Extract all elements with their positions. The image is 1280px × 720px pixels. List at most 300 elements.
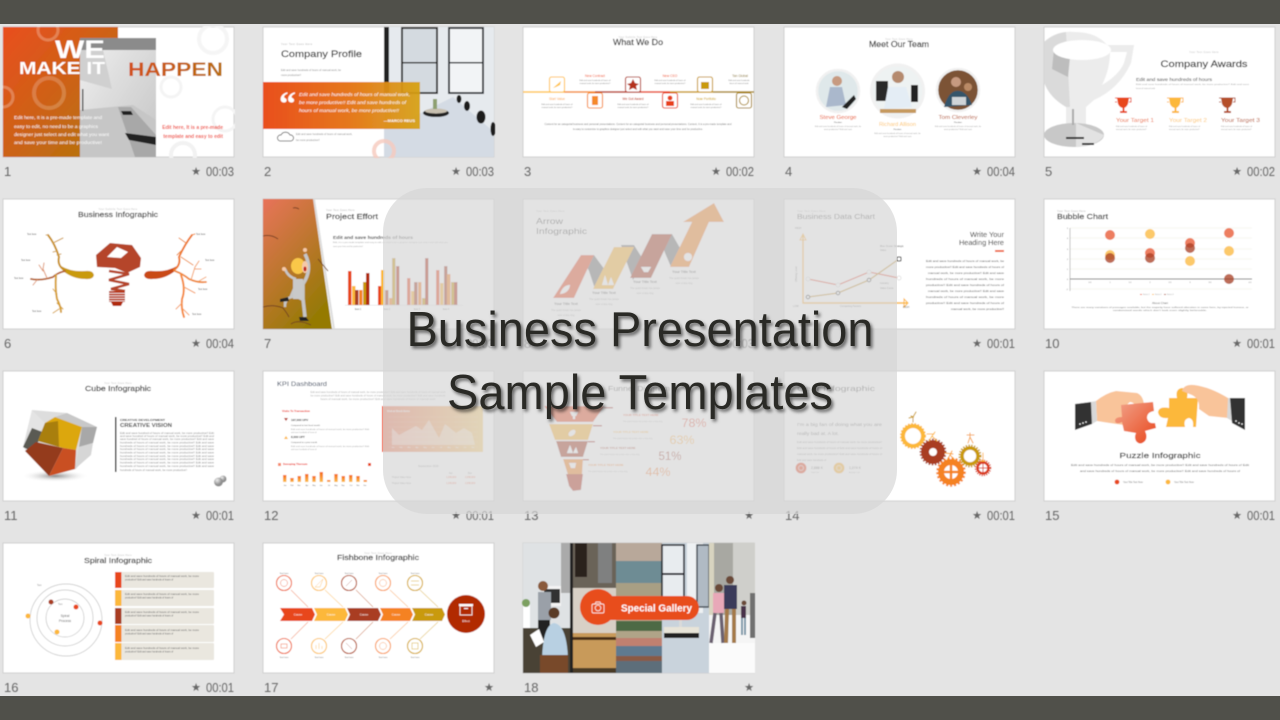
percentages — [646, 418, 706, 479]
area chart panel: Sep — [456, 447, 459, 449]
table: September 2020 — [418, 464, 439, 468]
title: What We Do — [613, 37, 663, 47]
area chart panel: May — [423, 447, 427, 449]
slide 3: what we do — [523, 27, 754, 157]
monthly bar chart: Jun — [320, 485, 322, 487]
caption 10: ★ — [1232, 338, 1242, 350]
left hand — [1075, 391, 1144, 430]
caption 10: 10 — [1045, 336, 1059, 351]
slide 8: arrow infographic: The quick brown fox jumps — [669, 277, 700, 280]
slide 7: project effort: save your time and be productive! — [333, 245, 363, 248]
slide 3: what we do: hours of manual work — [729, 83, 749, 85]
caption 3 — [524, 164, 754, 179]
slide 12: KPI dashboard: hours of manual work, be more productive!! Edit and save hundreds of hours of manual work — [320, 398, 437, 401]
slide 4: meet our team: more productive!! Edit and save — [944, 128, 973, 131]
table: 1,209,000 — [446, 483, 457, 485]
slide 3: what we do: manual work, be more productive!! — [691, 106, 722, 109]
caption 4: 00:04 — [987, 165, 1015, 179]
caption 16: 16 — [4, 680, 18, 695]
cause labels — [280, 572, 420, 659]
bubble chart: 3.5 — [1209, 282, 1212, 284]
cause circles — [276, 576, 422, 654]
timeline labels: New Contract — [585, 74, 605, 78]
caption 2: 00:03 — [466, 165, 494, 179]
bubble chart: 4 — [1067, 238, 1069, 240]
slide 2: company profile: be more productive!! — [296, 138, 320, 142]
caption 8 — [524, 336, 754, 351]
slide 4: meet our team: Edit and save hundreds of hours of manual work, be — [874, 132, 922, 135]
slide 7: project effort — [263, 199, 494, 329]
caption 1: 00:03 — [206, 165, 234, 179]
process rows: productive!! Edit and save hundreds of hours of — [125, 650, 173, 654]
caption 15 — [1045, 508, 1275, 523]
process rows: Edit and save hundreds of hours of manual work, be more — [125, 629, 200, 632]
caption 2: 2 — [264, 164, 271, 179]
lead text — [797, 422, 882, 437]
headline: MAKE IT — [19, 58, 105, 78]
branch labels: Text here — [32, 310, 42, 313]
line chart: HIGH — [795, 227, 801, 230]
slide 10: bubble chart — [1044, 199, 1275, 329]
red note — [162, 125, 223, 140]
slide 3: what we do: Edit and save hundreds of hours of — [690, 103, 722, 106]
slide 18: special gallery — [522, 543, 755, 673]
percentages: 51% — [658, 451, 682, 463]
paragraph — [926, 259, 1004, 311]
cause labels: Text here — [410, 656, 420, 659]
caption 4 — [785, 164, 1015, 179]
slide 4: meet our team: Your Text Goes Here — [885, 38, 913, 41]
title: Bubble Chart — [1057, 212, 1109, 221]
slide 5: company awards — [1044, 27, 1275, 157]
timeline icons — [550, 77, 752, 108]
trophy icons — [1115, 98, 1235, 113]
slide 8: arrow infographic: The quick brown fox jumps — [630, 287, 661, 290]
table: 2,058,000 — [465, 477, 476, 479]
timeline labels — [549, 74, 748, 101]
process rows: Edit and save hundreds of hours of manual work, be more — [125, 647, 200, 650]
line chart: Competing Factors — [840, 305, 862, 308]
slide 17: fishbone infographic — [263, 543, 494, 673]
caption 1: 1 — [4, 164, 11, 179]
line chart: Blue Ocean Strategic — [880, 245, 904, 248]
puzzle piece: red — [1115, 402, 1156, 444]
effect circle: Effect — [462, 619, 470, 623]
slide 10: bubble chart: Your Text Goes Here — [1057, 210, 1086, 213]
quote band: be more productive!! Edit and save hundreds of — [299, 100, 407, 105]
slide 5: company awards: manual work, be more productive!! — [1116, 128, 1147, 131]
photo strip 1 — [522, 543, 570, 673]
bubble chart: 5 — [1067, 228, 1069, 230]
bubble chart: 2 — [1067, 259, 1069, 261]
caption 9: 00:01 — [987, 337, 1015, 351]
monthly bar chart: May — [312, 485, 316, 487]
paragraph: hundreds of hours of manual work, be more productive!! Edit and save — [120, 447, 215, 451]
body text: designer just select and edit what you want — [14, 132, 110, 137]
slide 6: business infographic — [3, 199, 234, 329]
table — [392, 464, 476, 485]
area chart panel: Jan — [392, 447, 394, 449]
paragraph: hundreds of hours of manual work, be more productive!! Edit and save — [120, 444, 215, 448]
title: Sample Templates — [447, 366, 833, 420]
paragraph — [120, 431, 215, 472]
caption 8: 8 — [524, 336, 531, 351]
bubble chart: 1 — [1109, 282, 1111, 284]
slide 3: what we do: manual work, be more productive!! — [542, 106, 573, 109]
title — [406, 303, 874, 420]
caption 6: 00:04 — [206, 337, 234, 351]
title overlay panel — [383, 188, 897, 514]
caption 5 — [1045, 164, 1275, 179]
paragraph: hundreds of hours of manual work, be more productive!! Edit and save — [120, 464, 215, 468]
slide 4: meet our team: Position — [834, 121, 843, 124]
about chart — [1072, 301, 1249, 312]
area chart panel: Feb — [400, 447, 402, 449]
timeline labels: New CEO — [663, 74, 678, 78]
paragraph: hundreds of hours of manual work, be more — [926, 295, 1004, 299]
bubble chart: Series 1 — [1143, 294, 1150, 296]
top bar — [0, 0, 1280, 24]
caption 15: ★ — [1232, 510, 1242, 522]
slide 3: what we do: manual work, be more productive!! — [618, 106, 649, 109]
kpi block: Compared to a prior month — [291, 441, 318, 444]
caption 13: ★ — [744, 510, 754, 522]
paragraph: hundreds of hours of manual work, be more productive!! Edit and save — [120, 454, 215, 458]
paragraph: save hundred of hours of manual work, be more productive!! Edit and save — [120, 437, 215, 441]
bar chart: Item 2 — [384, 308, 391, 311]
slide 3: what we do: manual work, be more productive!! — [655, 82, 686, 85]
caption 2: ★ — [451, 166, 461, 178]
caption 2 — [264, 164, 494, 179]
quote band: —MARCO REUS — [384, 118, 415, 123]
photo strip 5 — [709, 543, 755, 673]
subtitle: Edit and save hundreds of hours — [333, 235, 414, 240]
caption 11: 00:01 — [206, 509, 234, 523]
table: 2,058,000 — [465, 483, 476, 485]
spheres — [214, 476, 226, 486]
funnel labels: YOUR TITLE TEXT HERE — [600, 446, 636, 450]
pill label — [580, 589, 699, 625]
line chart — [793, 227, 909, 309]
climber — [280, 248, 309, 321]
area chart panel — [382, 406, 483, 452]
timeline — [523, 91, 754, 93]
bubble chart: 0.5 — [1089, 282, 1092, 284]
heading: more productive!! — [281, 73, 301, 77]
targets: Your Target 1 — [1116, 118, 1154, 124]
paragraph: Edit and save hundred of hours of manual work, be more productive!! Edit — [120, 431, 214, 435]
arrow labels: Your Title Text — [672, 270, 697, 274]
funnel labels: YOUR TITLE TEXT HERE — [613, 430, 649, 434]
caption 7: 00:03 — [466, 337, 494, 351]
bubble chart: 4.5 — [1249, 282, 1252, 284]
funnel labels — [588, 413, 659, 467]
cause labels: Text here — [378, 656, 388, 659]
heading — [959, 232, 1005, 247]
spine chevrons — [280, 608, 445, 621]
caption 9: ★ — [972, 338, 982, 350]
photo strip 2 — [570, 543, 616, 673]
caption 16 — [4, 680, 234, 695]
slide 7: project effort: Your Text Goes Here — [326, 209, 355, 212]
names: Steve George — [820, 115, 856, 121]
caption 17: ★ — [484, 682, 494, 694]
spine chevrons: Cause — [360, 612, 369, 616]
heading: Your Text Goes Here — [281, 42, 313, 46]
heading: CREATIVE VISION — [120, 423, 172, 429]
cause labels: Text here — [410, 572, 420, 575]
monthly bar chart: Apr — [306, 484, 309, 487]
caption 14: 14 — [785, 508, 799, 523]
slide 2: company profile: Edit and save hundreds of hours of manual work, — [296, 132, 353, 136]
slide 8: arrow infographic: over a lazy dog — [637, 292, 654, 295]
caption 10: 00:01 — [1247, 337, 1275, 351]
slide 8: arrow infographic: over a lazy dog — [558, 314, 575, 317]
paragraph: Edit and save hundreds of — [797, 459, 826, 462]
right hand — [1182, 385, 1245, 430]
paragraph: hundreds of hours of manual work, be more productive!! Edit and save — [120, 460, 215, 464]
area chart panel: Nov — [472, 447, 475, 449]
quote band: “ — [279, 86, 296, 123]
slide 3: what we do: Your Subtitle Text Goes Here — [618, 36, 658, 39]
caption 5: 00:02 — [1247, 165, 1275, 179]
slide 11: cube infographic: Your Text Goes Here — [104, 382, 132, 385]
paragraph: more productive!! Edit and save hundreds of hours of — [926, 265, 1004, 269]
paragraph: productive!! Edit and save hundreds of hours of — [926, 283, 1004, 287]
slide 4: meet our team: Edit and save hundreds of hours of manual work, be — [815, 125, 862, 128]
portrait: Tom Cleverley — [937, 69, 979, 111]
slide 8: arrow infographic: The quick brown fox jumps — [589, 298, 620, 301]
caption 11 — [4, 508, 234, 523]
body text: Edit here, It is a pre-made template and — [14, 115, 102, 120]
about chart: randomised words which don't look even slightly believable. — [1113, 309, 1208, 312]
red note: template and easy to edit — [163, 134, 223, 140]
bar chart: Item 3 — [414, 308, 421, 311]
ribbon arrow — [553, 203, 724, 298]
caption 7 — [264, 336, 494, 351]
branch labels: Text here — [192, 313, 202, 316]
caption 17: 17 — [264, 680, 278, 695]
slide 4: meet our team: more productive!! Edit and save — [883, 135, 912, 138]
caption 12: 12 — [264, 508, 278, 523]
bubble chart: 3 — [1067, 249, 1069, 251]
monthly bar chart: Mar — [298, 484, 301, 487]
slide 12: KPI dashboard: Edit and save hundreds of hours of manual work, be more productive!! Edit and save hundreds of hours of manual work — [310, 391, 446, 394]
percentages: 44% — [646, 467, 670, 479]
caption 15: 15 — [1045, 508, 1059, 523]
bones — [291, 590, 438, 639]
bar chart: Item 4 — [443, 308, 450, 311]
photo strip 4 — [662, 543, 709, 673]
slide 3: what we do: Edit and save hundreds of hours of — [617, 103, 649, 106]
title: Gear Infographic — [797, 384, 875, 393]
slide 4: meet our team: Position — [954, 121, 963, 124]
heading: CREATIVE DEVELOPMENT — [120, 418, 165, 422]
title: KPI Dashboard — [277, 381, 328, 388]
bubble chart — [1066, 228, 1252, 296]
subtitle: Edit and save hundreds of hours — [1136, 77, 1213, 83]
area chart panel: Apr — [416, 446, 419, 449]
icon: cloud — [277, 132, 294, 141]
caption 13: 13 — [524, 508, 538, 523]
legend: Your Title Text Here — [1123, 481, 1144, 484]
divider — [115, 417, 116, 472]
paragraph — [544, 123, 732, 131]
title: Meet Our Team — [869, 40, 929, 49]
title: Arrow — [536, 216, 564, 226]
heading: Write Your — [970, 232, 1005, 239]
caption 15: 00:01 — [1247, 509, 1275, 523]
slide 14: gear infographic — [784, 371, 1015, 501]
bottom bar — [0, 696, 1280, 720]
stats: Total Cost — [811, 471, 819, 474]
timeline labels: Tan Global — [732, 74, 748, 78]
slide 4: meet our team: Edit and save hundreds of hours of manual work, be — [935, 125, 982, 128]
paragraph: and save hundreds of hours of manual work, be more productive!! Edit and save hundreds of hours of — [1080, 469, 1240, 473]
slide 6: business infographic: Your Subtitle Text Goes Here — [98, 208, 138, 211]
cause labels: Text here — [280, 572, 289, 575]
left tree — [31, 235, 94, 313]
headline: WE — [55, 36, 105, 64]
slide 8: arrow infographic: over a lazy dog — [676, 282, 693, 285]
red note: Edit here, It is a pre-made — [162, 125, 223, 131]
caption 3: 3 — [524, 164, 531, 179]
pill label: Special Gallery — [621, 604, 692, 614]
bubble chart: Series 2 — [1155, 294, 1162, 296]
line chart: LOW — [793, 305, 799, 308]
arrow labels: Your Title Text — [633, 280, 658, 284]
slide 16: spiral infographic — [3, 543, 234, 673]
area chart panel: Jul — [440, 447, 443, 449]
caption 3: 00:02 — [726, 165, 754, 179]
percentages: 78% — [682, 418, 706, 430]
caption 14: 00:01 — [987, 509, 1015, 523]
paragraph — [1071, 463, 1249, 473]
timeline labels: Now Portfolio — [696, 97, 716, 101]
bubble chart: 3 — [1189, 282, 1191, 284]
caption 7: ★ — [451, 338, 461, 350]
paragraph: is easy to customize to graphics designer just select and edit what you want and save your time and be productive. — [573, 128, 703, 131]
trophy silhouette — [1044, 32, 1134, 147]
about chart: About Chart — [1152, 301, 1168, 305]
line chart: HIGH — [903, 306, 909, 309]
branch labels: Text here — [198, 288, 208, 291]
caption 14: ★ — [972, 510, 982, 522]
area chart panel: Mar — [408, 447, 411, 449]
branch labels — [14, 233, 215, 316]
process rows: productive!! Edit and save hundreds of hours of — [125, 632, 173, 636]
title: Business Data Chart — [797, 212, 876, 221]
slide 4: meet our team — [784, 27, 1015, 157]
caption 16: 00:01 — [206, 681, 234, 695]
caption 16: ★ — [191, 682, 201, 694]
monthly bar chart: Feb — [291, 485, 294, 487]
slide 5: company awards: Your Text Goes Here — [1189, 50, 1219, 54]
slide 1: we make it happen — [2, 26, 235, 158]
slide 5: company awards: Edit and save hundreds of hours of manual work, be more productive!! Edit and save — [1136, 83, 1250, 86]
kpi block: Compared to last fiscal month — [291, 424, 321, 427]
monthly bar chart: Nov — [356, 485, 360, 487]
line chart: Value Curve — [880, 287, 894, 290]
monthly bar chart — [278, 462, 371, 487]
kpi block — [282, 409, 370, 451]
slide 13: funnel diagram: The quick brown fox jumps over a lazy dog — [588, 470, 628, 473]
caption 1 — [4, 164, 234, 179]
funnel labels: YOUR TITLE TEXT HERE — [588, 463, 624, 467]
line chart: Offering Level — [795, 266, 798, 282]
kpi block: Edit and save hundreds of hours of manual work, be more productive!! Edit — [291, 445, 370, 448]
process rows: productive!! Edit and save hundreds of hours of — [125, 614, 173, 618]
slide 5: company awards: Edit and save hundreds of hours of — [1221, 125, 1252, 128]
names: Richard Allison — [879, 122, 916, 128]
paragraph: hundreds of hours of manual work, be more productive!! — [120, 468, 187, 472]
caption 8: 00:03 — [726, 337, 754, 351]
monthly bar chart: Aug — [334, 484, 338, 487]
branch labels: Text here — [27, 233, 37, 236]
slide 13: funnel diagram: The quick brown fox jumps over a lazy dog — [613, 437, 653, 440]
slide 3: what we do: Edit and save hundreds of hours of — [579, 79, 611, 82]
percentages: 63% — [670, 435, 694, 447]
heading — [120, 418, 172, 429]
line chart: Industry — [880, 282, 890, 285]
branch labels: Text here — [21, 259, 31, 262]
slide 9: business data chart — [784, 199, 1015, 329]
area chart panel: Visit at Stock Items — [387, 410, 410, 413]
slide 8: arrow infographic: over a lazy dog — [596, 303, 613, 306]
title: Funnel Diagram — [608, 384, 670, 393]
bubble chart: 4 — [1229, 282, 1231, 284]
caption 6 — [4, 336, 234, 351]
spine chevrons: Cause — [392, 612, 401, 616]
title — [536, 216, 587, 236]
monthly bar chart: Jan — [284, 485, 286, 487]
cause labels: Text here — [314, 572, 324, 575]
process rows: Edit and save hundreds of hours of manual work, be more — [125, 611, 200, 614]
slide 13: funnel diagram: The quick brown fox jumps over a lazy dog — [623, 420, 663, 423]
arrow labels — [554, 270, 697, 306]
cause labels: Text here — [314, 656, 324, 659]
kpi block: 8,000 UPT — [291, 435, 305, 439]
bar chart — [345, 258, 463, 311]
monthly bar chart: Jul — [328, 485, 331, 487]
funnel labels: YOUR TITLE TEXT HERE — [623, 413, 659, 417]
timeline labels: We Got Award — [622, 97, 644, 101]
slide 4: meet our team: more productive!! Edit and save — [824, 128, 853, 131]
monthly bar chart: Dec — [363, 485, 367, 487]
table: Project Value Area — [392, 476, 412, 479]
stats: 1,074 K — [849, 466, 862, 470]
slide 12: KPI dashboard: be more productive!! Edit and save hundreds of hours of manual work, be more productive!! Edit and save hundreds — [310, 394, 446, 398]
heading: Heading Here — [959, 240, 1004, 247]
branch labels: Text here — [14, 277, 24, 280]
process rows: Edit and save hundreds of hours of manual work, be more — [125, 575, 200, 578]
branch labels: Text here — [196, 233, 206, 236]
quote band: hours of manual work, be more productive!! — [299, 108, 400, 113]
body text — [14, 115, 110, 145]
slide 3: what we do: Edit and save hundreds — [728, 79, 750, 82]
spine chevrons: Cause — [425, 612, 434, 616]
targets: Your Target 3 — [1221, 118, 1260, 124]
slide 5: company awards: manual work, be more productive!! — [1221, 128, 1252, 131]
caption 9: 9 — [785, 336, 792, 351]
slide 7: project effort: Edit, it is a pre-made template and easy to edit, no need to be a graphics designer just select and edit what you — [333, 241, 448, 244]
caption 5: ★ — [1232, 166, 1242, 178]
stats — [796, 462, 862, 474]
spiral rings: Text — [58, 603, 63, 606]
paragraph: manual work, be more productive!! Edit and save — [928, 289, 1004, 293]
caption 18: ★ — [744, 682, 754, 694]
slide 3: what we do: manual work, be more productive!! — [580, 82, 611, 85]
